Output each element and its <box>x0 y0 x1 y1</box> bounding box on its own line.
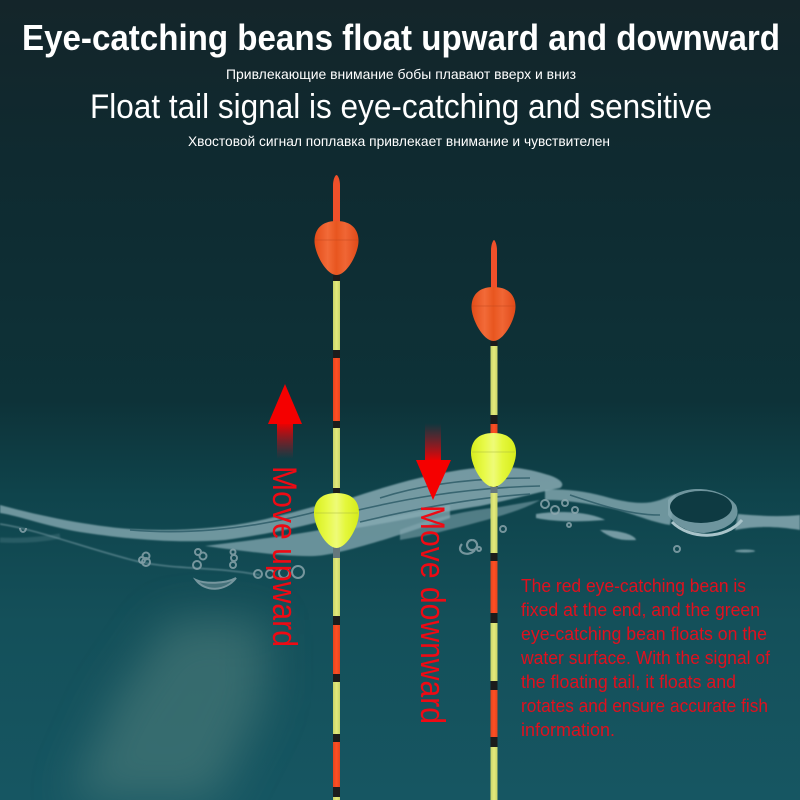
russian subtitle 1: Привлекающие внимание бобы плавают вверх и вниз <box>226 66 576 82</box>
stem segments <box>333 275 340 800</box>
label: move downward: Move downward <box>413 505 451 724</box>
description text block: information. <box>521 720 615 740</box>
right chain <box>545 489 676 525</box>
stem segments <box>490 341 498 800</box>
small bubbles <box>20 500 680 589</box>
green eye-catching bean <box>314 493 359 548</box>
label: move upward: Move upward <box>265 466 303 647</box>
description text block: fixed at the end, and the green <box>521 600 760 620</box>
description text block: eye-catching bean floats on the <box>521 624 767 644</box>
description text block: water surface. With the signal of <box>520 648 771 668</box>
bean seam <box>472 451 515 453</box>
float: left <box>314 175 359 800</box>
description text block: rotates and ensure accurate fish <box>521 696 768 716</box>
lower left band <box>205 505 450 556</box>
tail tip <box>491 240 497 288</box>
arrow: up <box>268 384 302 459</box>
left thin band <box>0 498 345 541</box>
description text block: the floating tail, it floats and <box>521 672 736 692</box>
green eye-catching bean <box>471 433 516 487</box>
russian subtitle 2: Хвостовой сигнал поплавка привлекает внимание и чувствителен <box>188 133 610 149</box>
water surface wave <box>0 467 800 589</box>
description text block <box>520 576 771 740</box>
subtitle: Float tail signal is eye-catching and sensitive <box>90 88 712 126</box>
description text block: The red eye-catching bean is <box>521 576 746 596</box>
arrow: down <box>416 423 451 500</box>
large bubble <box>668 489 742 535</box>
bean seam <box>315 512 358 514</box>
bean seam <box>472 305 515 307</box>
tail tip <box>333 175 340 222</box>
central crest <box>345 467 562 530</box>
bean seam <box>315 239 358 241</box>
red eye-catching bean <box>314 221 358 275</box>
float: right <box>471 240 516 800</box>
dark streaks inside wave <box>130 478 660 532</box>
red eye-catching bean <box>472 287 516 341</box>
